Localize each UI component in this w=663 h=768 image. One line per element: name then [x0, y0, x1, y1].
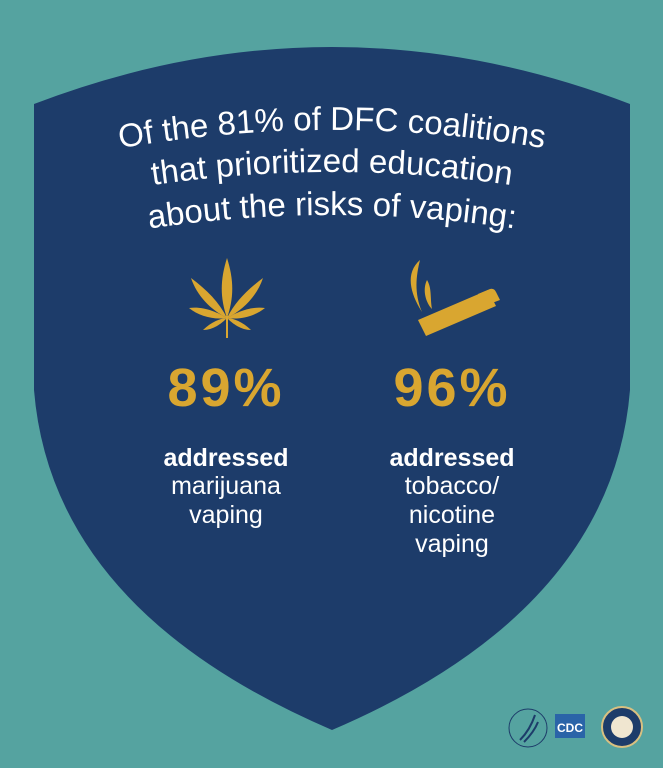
text: tobacco [389, 444, 515, 558]
text: marijuana: addressed [163, 444, 289, 472]
text: marijuana: vaping [189, 501, 263, 529]
text: tobacco: nicotine [409, 501, 495, 529]
text: tobacco: addressed [389, 444, 515, 472]
text: tobacco: vaping [415, 530, 489, 558]
title: that prioritized education [150, 148, 511, 185]
text: marijuana: marijuana [171, 472, 281, 500]
icon: cigarette [411, 260, 500, 336]
title: about the risks of vaping: [150, 191, 514, 233]
text: tobacco: tobacco/ [405, 472, 499, 500]
shield [34, 47, 630, 730]
stat: 89%: 89% [167, 358, 285, 418]
title: Of the 81% of DFC coalitions [120, 106, 544, 148]
logos [509, 707, 642, 747]
title [120, 106, 544, 233]
icon: marijuana leaf [189, 258, 265, 338]
stat: 96%: 96% [393, 358, 511, 418]
text: marijuana [163, 444, 289, 529]
logos: CDC [557, 721, 583, 735]
